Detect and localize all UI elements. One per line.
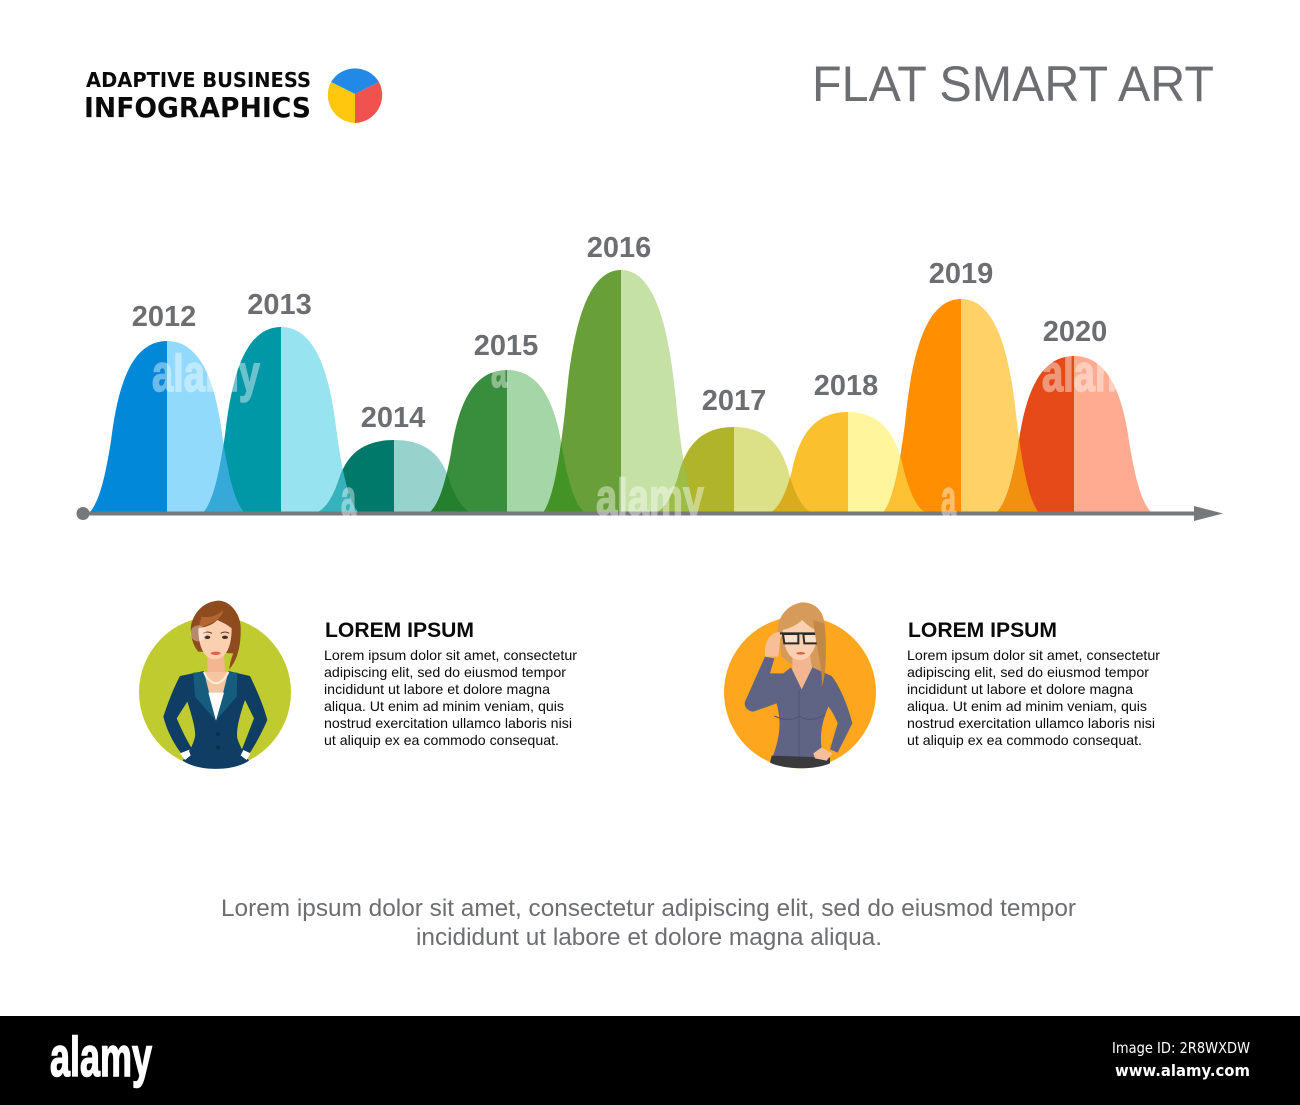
logo text: ADAPTIVE BUSINESS (86, 68, 311, 92)
logo: adaptive business infographics (84, 68, 382, 124)
text block: right lorem ipsum (907, 619, 1160, 748)
bar 2013 (203, 327, 359, 513)
watermark overlays: alamy (1042, 345, 1150, 403)
website: www.alamy.com (1115, 1061, 1250, 1080)
watermark overlays (152, 352, 1116, 516)
icon: three-colour pie (328, 68, 382, 123)
year labels: 2018 (814, 370, 878, 402)
caption text (221, 895, 1076, 951)
text block: right lorem ipsum: incididunt ut labore et dolore magna (907, 681, 1133, 697)
watermark overlays: a (941, 470, 957, 528)
text block: right lorem ipsum: LOREM IPSUM (908, 619, 1057, 642)
panel: left person (139, 601, 577, 769)
year labels: 2017 (702, 385, 766, 417)
bar 2018 (770, 412, 926, 513)
text block: left lorem ipsum (324, 619, 577, 748)
text block: left lorem ipsum: adipiscing elit, sed do eiusmod tempor (324, 664, 566, 680)
text block: right lorem ipsum: nostrud exercitation ullamco laboris nisi (907, 715, 1155, 731)
year labels: 2016 (587, 232, 651, 264)
overlap lenses between neighbouring bars (204, 439, 1038, 512)
text block: right lorem ipsum: ut aliquip ex ea commodo consequat. (907, 732, 1142, 748)
year labels: 2012 (132, 301, 196, 333)
bar 2016 (543, 270, 699, 513)
title: FLAT SMART ART (812, 56, 1214, 112)
icon: businesswoman in navy jacket on green circle (139, 601, 291, 769)
caption text: incididunt ut labore et dolore magna aliqua. (416, 924, 882, 951)
year labels: 2015 (474, 330, 538, 362)
year labels: 2019 (929, 258, 993, 290)
text block: left lorem ipsum: nostrud exercitation ullamco laboris nisi (324, 715, 572, 731)
bar 2012 (89, 341, 245, 513)
bar 2020 (996, 356, 1152, 513)
text block: right lorem ipsum: adipiscing elit, sed do eiusmod tempor (907, 664, 1149, 680)
watermark overlays: alamy (596, 469, 704, 527)
bar 2014 (316, 440, 472, 513)
year labels (132, 232, 1107, 434)
icon: businesswoman with glasses on orange circle (724, 602, 876, 768)
year labels: 2013 (247, 289, 312, 321)
bar 2019 (883, 299, 1039, 513)
year labels: 2020 (1043, 316, 1107, 348)
text block: left lorem ipsum: incididunt ut labore et dolore magna (324, 681, 550, 697)
watermark overlays: alamy (152, 345, 260, 403)
footer band (0, 1016, 1300, 1105)
text block: left lorem ipsum: aliqua. Ut enim ad minim veniam, quis (324, 698, 564, 714)
year labels: 2014 (361, 402, 425, 434)
bar 2017 (656, 427, 812, 513)
bar 2015 (429, 370, 585, 513)
text block: right lorem ipsum: aliqua. Ut enim ad minim veniam, quis (907, 698, 1147, 714)
chart: yearly bell-shaped bars on timeline (76, 232, 1223, 521)
text block: left lorem ipsum: ut aliquip ex ea commodo consequat. (324, 732, 559, 748)
logo text (84, 68, 311, 124)
logo text: INFOGRAPHICS (84, 92, 311, 124)
text block: left lorem ipsum: Lorem ipsum dolor sit amet, consectetur (324, 647, 577, 663)
footer logo: alamy (50, 1025, 152, 1088)
timeline axis arrow (76, 506, 1223, 521)
image id: Image ID: 2R8WXDW (1112, 1039, 1250, 1057)
text block: left lorem ipsum: LOREM IPSUM (325, 619, 474, 642)
text block: right lorem ipsum: Lorem ipsum dolor sit amet, consectetur (907, 647, 1160, 663)
watermark overlays: a (341, 470, 357, 528)
watermark overlays: a (491, 341, 508, 399)
panel: right person (724, 602, 1160, 768)
caption text: Lorem ipsum dolor sit amet, consectetur adipiscing elit, sed do eiusmod tempor (221, 895, 1076, 922)
